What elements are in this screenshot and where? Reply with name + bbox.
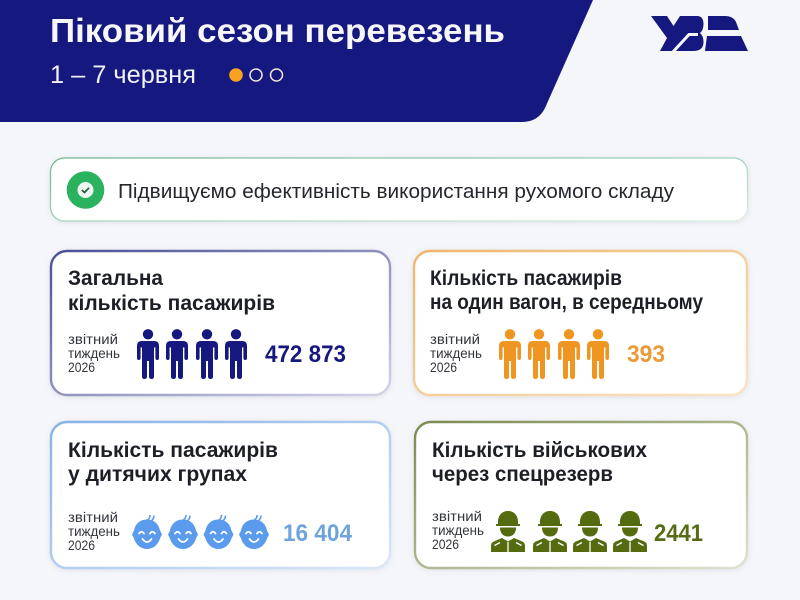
heading: на один вагон, в середньому [430, 291, 703, 314]
heading: Загальна [68, 267, 163, 290]
heading [68, 439, 278, 486]
heading [430, 267, 703, 314]
heading: у дитячих групах [68, 463, 247, 486]
heading: кількість пасажирів [68, 292, 275, 315]
period label: звітний [68, 509, 118, 525]
period label: звітний [68, 331, 118, 347]
heading: через спецрезерв [432, 463, 613, 486]
value: 472 873 [265, 341, 346, 368]
heading [68, 267, 275, 315]
logo: UZ [651, 16, 748, 53]
panel: passengers per car [414, 251, 747, 395]
week indicator dots [229, 68, 282, 82]
panel: total passengers [51, 251, 390, 395]
heading: Кількість пасажирів [68, 439, 278, 462]
period label [432, 508, 484, 552]
panel: children groups [51, 422, 390, 568]
period label: тиждень [430, 345, 482, 361]
value: 16 404 [283, 520, 353, 547]
heading: Кількість пасажирів [430, 267, 622, 290]
period label: тиждень [432, 522, 484, 538]
date range: 1 – 7 червня [50, 61, 196, 89]
icons: people [499, 329, 609, 379]
period label [68, 509, 120, 553]
period label: 2026 [68, 359, 95, 375]
value: 393 [627, 341, 665, 368]
period label: 2026 [432, 536, 459, 552]
header banner [0, 0, 593, 122]
heading: Кількість військових [432, 439, 647, 462]
icons: children [132, 515, 269, 549]
panel: military personnel [415, 422, 747, 568]
period label: звітний [432, 508, 482, 524]
period label [68, 331, 120, 375]
period label: 2026 [430, 359, 457, 375]
heading [432, 439, 647, 486]
callout text: Підвищуємо ефективність використання рухомого складу [118, 181, 674, 203]
period label [430, 331, 482, 375]
title: Піковий сезон перевезень [50, 12, 505, 49]
icons: people [137, 329, 247, 379]
period label: звітний [430, 331, 480, 347]
period label: 2026 [68, 537, 95, 553]
icon: check mark [67, 171, 104, 209]
period label: тиждень [68, 345, 120, 361]
callout: efficiency [50, 158, 748, 221]
period label: тиждень [68, 523, 120, 539]
icons: soldiers [491, 511, 647, 552]
value: 2441 [654, 520, 703, 547]
